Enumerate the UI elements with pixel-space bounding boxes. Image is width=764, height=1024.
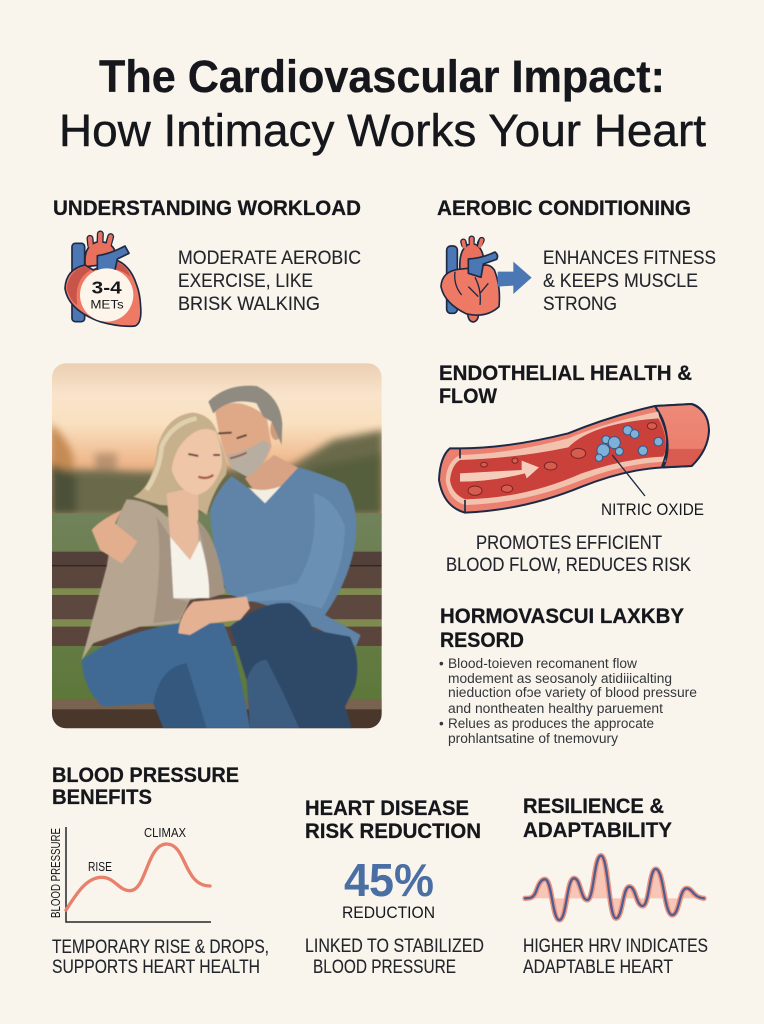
heading: hormovascui laxkby resord: RESORD [440, 629, 524, 652]
title: The Cardiovascular Impact: [99, 51, 665, 102]
panel: hormovascular section [439, 605, 697, 746]
panel: blood pressure benefits [49, 764, 269, 978]
icon: arrow [498, 262, 532, 294]
text: temporary rise [52, 936, 269, 978]
text: promotes efficient blood flow: PROMOTES EFFICIENT [476, 532, 662, 554]
text: temporary rise: TEMPORARY RISE & DROPS, [52, 936, 269, 958]
line chart: CLIMAX [144, 826, 187, 840]
bullet list: Blood-toieven recomanent flow [448, 656, 637, 671]
heading: resilience and adaptability: RESILIENCE & [523, 795, 664, 818]
bullet list: prohlantsatine of tnemovury [448, 731, 618, 746]
text: higher hrv [523, 935, 708, 978]
text: enhances fitness [543, 247, 716, 315]
panel: aerobic conditioning [437, 197, 716, 322]
illustration: artery [439, 404, 709, 513]
heading: blood pressure benefits: BENEFITS [52, 786, 152, 809]
icon: heart with 3-4 METs: 3-4 [92, 277, 122, 297]
heading: heart disease risk reduction: RISK REDUCTION [305, 820, 481, 843]
bullet list: • [439, 656, 444, 671]
heading: aerobic conditioning: AEROBIC CONDITIONING [437, 197, 691, 220]
text: linked to stabilized [305, 935, 484, 978]
bullet list: and nontheaten healthy paruement [448, 701, 663, 716]
bullet list [439, 656, 697, 746]
text: temporary rise: SUPPORTS HEART HEALTH [52, 956, 260, 978]
heading: endothelial health: FLOW [439, 385, 497, 408]
text: moderate aerobic exercise [178, 247, 361, 315]
chart: heart rate variability wave [525, 856, 704, 920]
bench [50, 552, 390, 729]
man [244, 455, 298, 491]
heading: hormovascui laxkby resord [440, 605, 684, 652]
photo: couple on bench [50, 360, 390, 729]
heading: heart disease risk reduction [305, 797, 481, 843]
heading: resilience and adaptability: ADAPTABILITY [523, 819, 672, 842]
stat: 45% reduction: REDUCTION [342, 903, 435, 922]
bullet list: nieduction ofɔe variety of blood pressure [448, 685, 697, 700]
stat: 45% reduction: 45% [344, 854, 434, 906]
bullet list: Relues as produces the approcate [448, 716, 654, 731]
icon: heart [441, 239, 532, 322]
heading: endothelial health: ENDOTHELIAL HEALTH & [439, 362, 692, 385]
text: moderate aerobic exercise: MODERATE AEROBIC [178, 247, 361, 269]
text: linked to stabilized: BLOOD PRESSURE [313, 956, 456, 978]
heading: heart disease risk reduction: HEART DISEASE [305, 797, 469, 820]
text: linked to stabilized: LINKED TO STABILIZED [305, 935, 484, 957]
text: promotes efficient blood flow: BLOOD FLOW, REDUCES RISK [446, 554, 691, 576]
text: promotes efficient blood flow [446, 532, 691, 576]
panel: understanding workload [53, 197, 361, 326]
heading: endothelial health [439, 362, 692, 408]
line chart: RISE [88, 860, 112, 874]
text: enhances fitness: & KEEPS MUSCLE [543, 270, 698, 292]
text: moderate aerobic exercise: BRISK WALKING [178, 293, 320, 315]
text: enhances fitness: ENHANCES FITNESS [543, 247, 716, 269]
heading: blood pressure benefits [52, 764, 239, 809]
text: enhances fitness: STRONG [543, 293, 617, 315]
title: How Intimacy Works Your Heart [59, 105, 706, 156]
panel: resilience and adaptability [523, 795, 708, 978]
icon: heart with 3-4 METs [65, 234, 141, 326]
text: higher hrv: ADAPTABLE HEART [523, 956, 673, 978]
bullet list: modement as seosanoly atidiiicalting [448, 671, 672, 686]
text: higher hrv: HIGHER HRV INDICATES [523, 935, 708, 957]
heading: resilience and adaptability [523, 795, 672, 842]
callout line: nitric oxide [612, 455, 645, 496]
text: moderate aerobic exercise: EXERCISE, LIKE [178, 270, 313, 292]
heading: blood pressure benefits: BLOOD PRESSURE [52, 764, 239, 787]
label: nitric oxide: NITRIC OXIDE [601, 501, 704, 519]
line chart [49, 826, 211, 922]
title [59, 51, 706, 156]
heading: hormovascui laxkby resord: HORMOVASCUI LAXKBY [440, 605, 684, 628]
line chart: BLOOD PRESSURE [49, 828, 63, 918]
woman [82, 499, 225, 660]
bullet list: • [439, 716, 444, 731]
icon: heart with 3-4 METs: METs [90, 297, 124, 311]
heading: understanding workload: UNDERSTANDING WORKLOAD [53, 197, 361, 220]
panel: heart disease risk reduction [305, 797, 484, 978]
panel: endothelial health and flow [439, 362, 709, 576]
hands [92, 510, 137, 563]
